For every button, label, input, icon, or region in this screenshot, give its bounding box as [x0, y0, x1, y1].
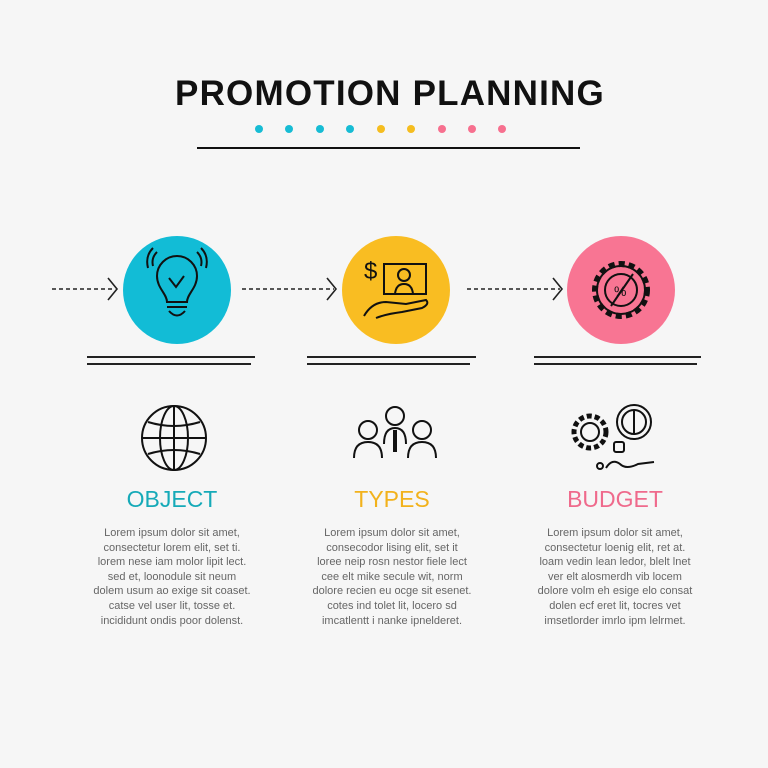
- heading: BUDGET: BUDGET: [567, 486, 663, 512]
- text: types: loree neip rosn nestor fiele lect: [317, 556, 467, 568]
- text: types: imcatlentt i nanke ipnelderet.: [322, 615, 462, 627]
- text: types: consecodor lising elit, set it: [326, 542, 458, 554]
- text: object: consectetur lorem elit, set ti.: [104, 542, 240, 554]
- text: types: cotes ind tolet lit, locero sd: [327, 600, 457, 612]
- icon: budget gears: [572, 404, 654, 470]
- text: types: cee elt mike secule wit, norm: [321, 571, 463, 583]
- icon circle: gear percent: [567, 236, 675, 344]
- text: budget: imsetlorder imrlo ipm lelrmet.: [544, 615, 686, 627]
- title: PROMOTION PLANNING: [175, 74, 605, 113]
- text: object: incididunt ondis poor dolenst.: [101, 615, 243, 627]
- text: object: catse vel user lit, tosse et.: [109, 600, 235, 612]
- heading: OBJECT: OBJECT: [127, 486, 217, 512]
- text: object: [93, 527, 251, 627]
- text: budget: consectetur loenig elit, ret at.: [545, 542, 685, 554]
- text: object: Lorem ipsum dolor sit amet,: [104, 527, 240, 539]
- text: budget: loam vedin lean ledor, blelt lnet: [539, 556, 691, 568]
- heading: TYPES: TYPES: [354, 486, 430, 512]
- text: budget: dolore volm eh esige elo consat: [538, 585, 692, 597]
- icon circle: money: $: [364, 258, 377, 285]
- text: budget: Lorem ipsum dolor sit amet,: [547, 527, 683, 539]
- text: types: dolore recien eu ocge sit esenet.: [312, 585, 472, 597]
- icon circle: lightbulb: [123, 236, 231, 344]
- icon: globe: [141, 405, 207, 471]
- text: budget: ver elt alosmerdh vib locem: [548, 571, 682, 583]
- icon: people: [353, 406, 437, 458]
- text: types: [312, 527, 472, 627]
- text: budget: dolen ecf eret lit, tocres vet: [549, 600, 681, 612]
- icon circle: money: [342, 236, 450, 344]
- text: object: lorem nese iam molor lipit lect.: [98, 556, 246, 568]
- icon circle: gear percent: %: [614, 283, 626, 299]
- text: object: dolem usum ao exige sit coaset.: [93, 585, 251, 597]
- text: object: sed et, loonodule sit neum: [108, 571, 236, 583]
- text: budget: [538, 527, 692, 627]
- text: types: Lorem ipsum dolor sit amet,: [324, 527, 460, 539]
